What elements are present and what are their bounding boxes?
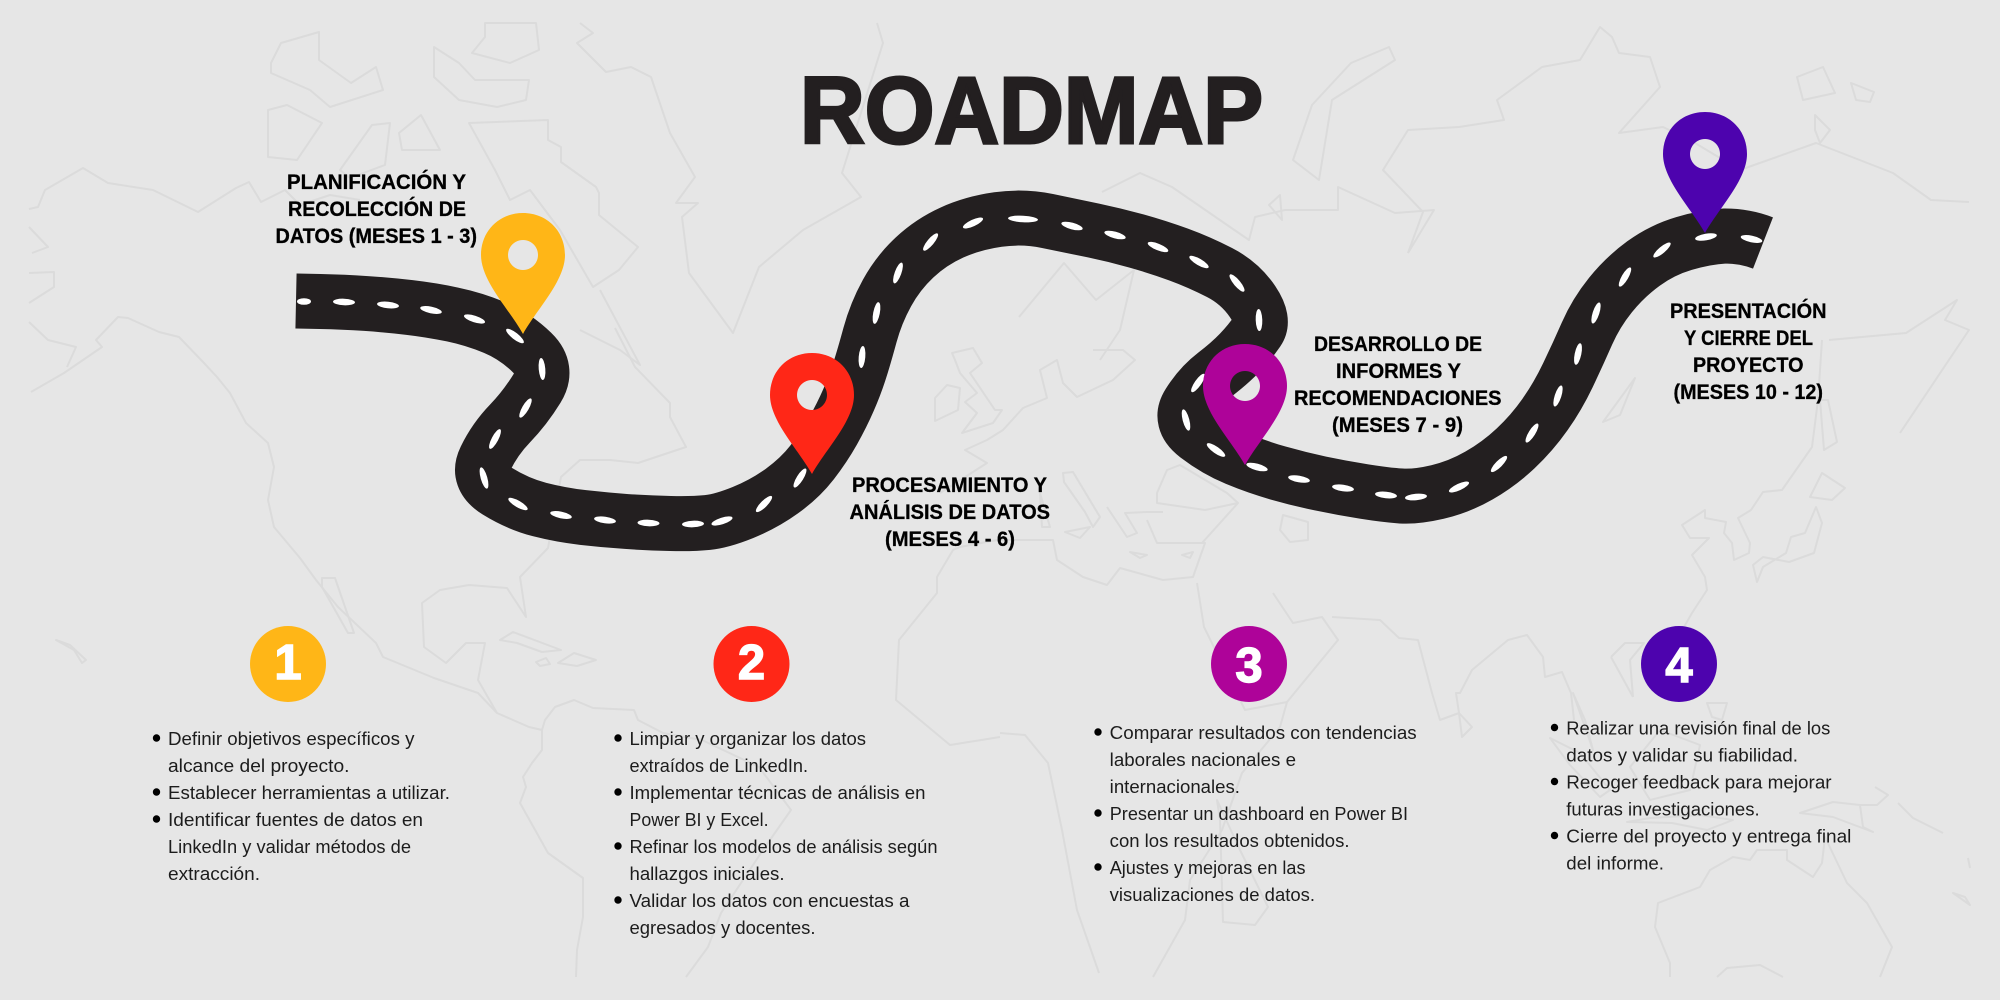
bullet list: phase 3: visualizaciones de datos. [1110, 885, 1315, 905]
bullet list: phase 1: Establecer herramientas a utilizar. [168, 783, 450, 803]
bullet list: phase 3: con los resultados obtenidos. [1110, 831, 1350, 851]
icon: red location pin [770, 353, 854, 474]
heading: phase 4 [1670, 299, 1826, 404]
number badge 1 [250, 626, 326, 702]
heading: phase 3: DESARROLLO DE [1314, 333, 1482, 356]
winding road [296, 215, 1763, 528]
icon: yellow location pin [481, 213, 565, 334]
bullet list: phase 1 [153, 729, 450, 884]
number badge 4: 4 [1665, 639, 1693, 693]
heading: phase 1: DATOS (MESES 1 - 3) [276, 225, 477, 248]
bullet list: phase 4: del informe. [1566, 853, 1664, 873]
bullet list: phase 2: hallazgos iniciales. [630, 864, 784, 884]
heading: phase 4: PRESENTACIÓN [1670, 299, 1826, 323]
bullet list: phase 1: LinkedIn y validar métodos de [168, 837, 411, 857]
bullet list: phase 4: Realizar una revisión final de los [1566, 718, 1830, 738]
heading: phase 3: INFORMES Y [1336, 360, 1461, 383]
heading: phase 1: PLANIFICACIÓN Y [287, 170, 466, 194]
heading: phase 4: Y CIERRE DEL [1684, 327, 1813, 350]
bullet list: phase 2: extraídos de LinkedIn. [630, 756, 808, 776]
bullet list: phase 1: Definir objetivos específicos y [168, 729, 414, 749]
heading: phase 1: RECOLECCIÓN DE [288, 197, 466, 221]
bullet list: phase 3: Presentar un dashboard en Power BI [1110, 804, 1408, 824]
icon: magenta location pin [1203, 344, 1287, 465]
bullet list: phase 3 [1094, 723, 1417, 905]
bullet list: phase 1: Identificar fuentes de datos en [168, 810, 423, 830]
bullet list: phase 3: laborales nacionales e [1110, 750, 1296, 770]
bullet list: phase 4: Recoger feedback para mejorar [1566, 772, 1832, 792]
bullet list: phase 3: internacionales. [1110, 777, 1240, 797]
bullet list: phase 2 [614, 729, 938, 938]
heading: phase 4: PROYECTO [1693, 354, 1804, 377]
icon: purple location pin [1663, 112, 1747, 233]
number badge 2: 2 [738, 636, 765, 690]
bullet list: phase 2: Power BI y Excel. [630, 810, 768, 830]
heading: phase 2: (MESES 4 - 6) [885, 528, 1015, 551]
number badge 3 [1211, 626, 1287, 702]
heading: phase 3 [1294, 333, 1502, 437]
road centre dashes [297, 215, 1763, 528]
heading: phase 3: RECOMENDACIONES [1294, 387, 1502, 410]
bullet list: phase 1: alcance del proyecto. [168, 756, 350, 776]
bullet list: phase 4: futuras investigaciones. [1566, 799, 1760, 819]
bullet list: phase 2: Implementar técnicas de análisis en [630, 783, 926, 803]
bullet list: phase 1: extracción. [168, 864, 260, 884]
bullet list: phase 3: Comparar resultados con tendencias [1110, 723, 1417, 743]
heading: phase 1 [276, 170, 477, 248]
heading: phase 2: PROCESAMIENTO Y [852, 474, 1047, 497]
number badge 2 [714, 626, 790, 702]
bullet list: phase 2: egresados y docentes. [630, 918, 816, 938]
number badge 1: 1 [274, 636, 302, 690]
bullet list: phase 3: Ajustes y mejoras en las [1110, 858, 1306, 878]
heading: phase 2 [850, 474, 1050, 551]
bullet list: phase 2: Refinar los modelos de análisis según [630, 837, 938, 857]
number badge 3: 3 [1235, 639, 1263, 693]
heading: phase 3: (MESES 7 - 9) [1332, 414, 1463, 437]
title: ROADMAP [800, 58, 1263, 164]
heading: phase 2: ANÁLISIS DE DATOS [850, 501, 1050, 524]
bullet list: phase 4: datos y validar su fiabilidad. [1566, 745, 1798, 765]
bullet list: phase 2: Limpiar y organizar los datos [630, 729, 866, 749]
bullet list: phase 4: Cierre del proyecto y entrega final [1566, 826, 1851, 846]
bullet list: phase 2: Validar los datos con encuestas a [630, 891, 911, 911]
bullet list: phase 4 [1551, 718, 1851, 873]
number badge 4 [1641, 626, 1717, 702]
heading: phase 4: (MESES 10 - 12) [1674, 381, 1823, 404]
